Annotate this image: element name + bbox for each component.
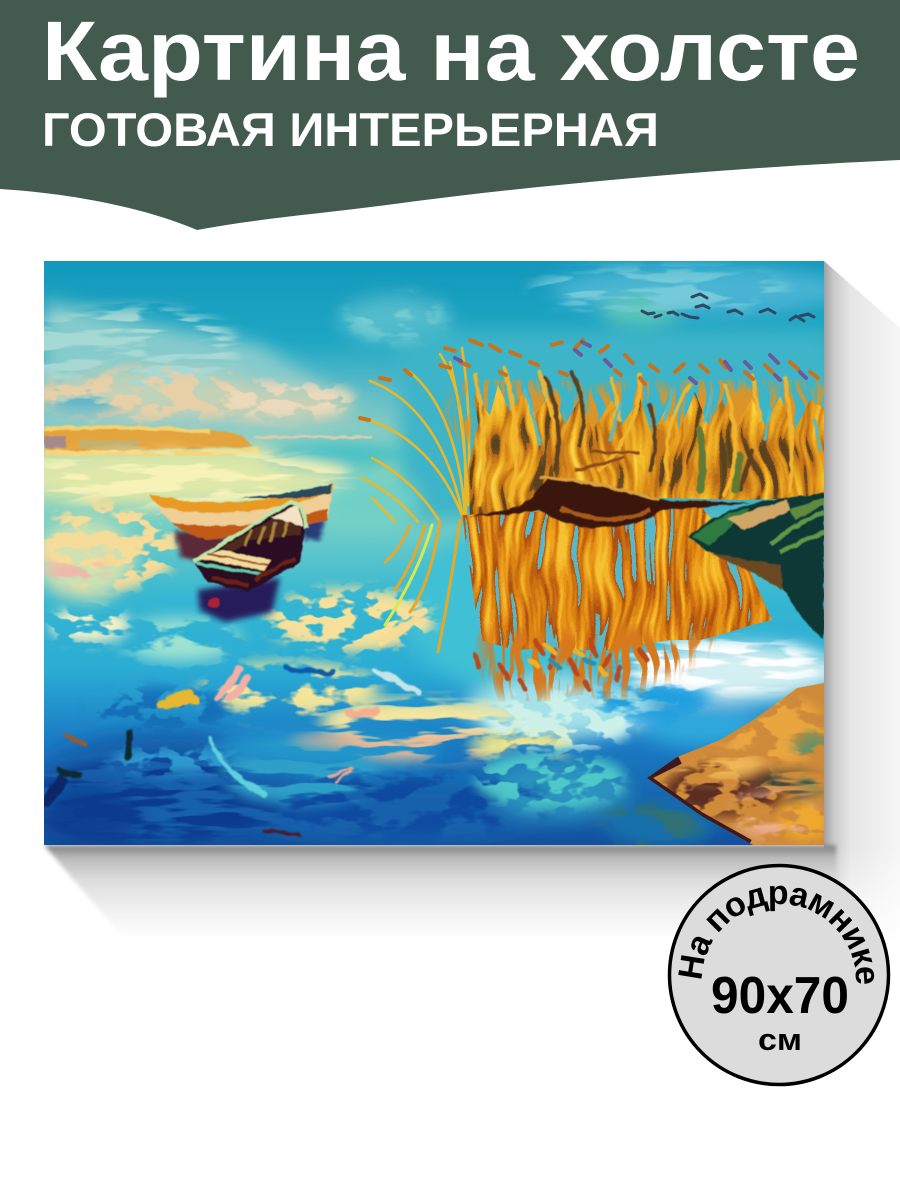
textured water strokes — [10, 452, 820, 845]
dark water line under reeds — [468, 452, 750, 528]
badge unit: см — [758, 1022, 802, 1057]
size badge — [668, 864, 890, 1086]
thin left reeds — [360, 348, 469, 522]
front boat — [193, 502, 307, 608]
rock — [647, 683, 824, 845]
reflected left reeds — [385, 520, 460, 652]
reed mass — [468, 385, 824, 516]
canvas drop shadow — [44, 261, 900, 947]
reed seed heads — [360, 340, 818, 420]
sky and water colour masses — [10, 266, 850, 847]
reed blade accents — [475, 368, 820, 505]
textured sky strokes — [20, 268, 790, 421]
brush strokes: water dabs — [48, 612, 425, 834]
painting — [10, 261, 850, 850]
distant shore — [44, 426, 372, 455]
reflection of reeds — [385, 505, 772, 695]
reflection fringe — [480, 630, 720, 695]
green header banner — [0, 0, 900, 230]
subtitle: ГОТОВАЯ ИНТЕРЬЕРНАЯ — [42, 103, 659, 156]
title: Картина на холсте — [42, 4, 860, 98]
birds — [642, 294, 814, 321]
dark river bank — [688, 493, 824, 640]
back boat — [149, 484, 333, 565]
reeds — [360, 340, 824, 522]
front boat reflection — [198, 578, 280, 622]
badge arc caption: На подрамнике — [678, 886, 874, 984]
loose reed blades — [455, 385, 824, 440]
badge size: 90x70 — [711, 967, 849, 1025]
